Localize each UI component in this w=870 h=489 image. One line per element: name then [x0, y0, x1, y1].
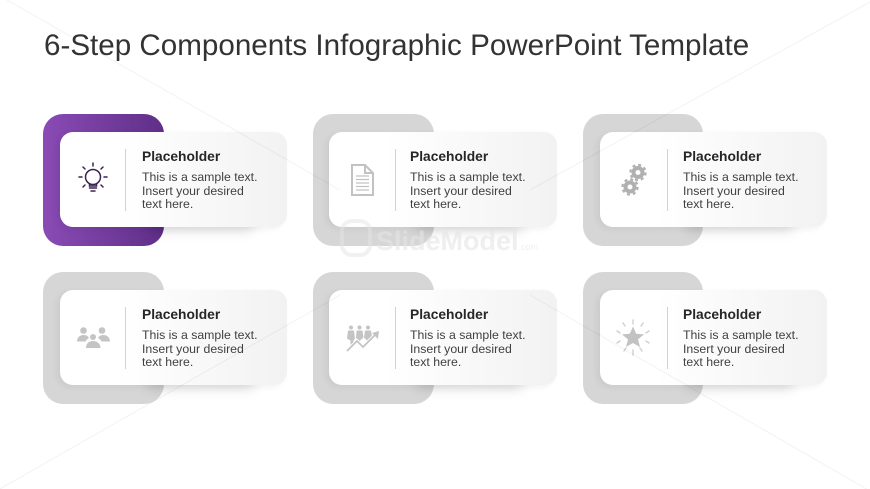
text block: text here. [683, 197, 734, 211]
panel: step 4 team [43, 272, 287, 404]
panel: step 6 star [583, 272, 827, 404]
text block: Insert your desired [142, 184, 244, 198]
text block: Insert your desired [142, 342, 244, 356]
watermark: SlideModel.com [376, 226, 538, 256]
title: 6-Step Components Infographic PowerPoint Template [44, 29, 749, 62]
icon: document [351, 164, 374, 196]
heading: Placeholder [410, 149, 488, 164]
text block [142, 328, 258, 369]
text block: This is a sample text. [683, 328, 798, 342]
text block [683, 328, 798, 369]
text block: text here. [142, 355, 193, 369]
text block: This is a sample text. [410, 170, 526, 184]
watermark [340, 219, 538, 257]
text block: text here. [410, 355, 461, 369]
text block: text here. [683, 355, 734, 369]
text block [410, 328, 526, 369]
icon: people with rising arrow [346, 326, 379, 352]
icon: light bulb [78, 162, 108, 192]
heading: Placeholder [683, 307, 761, 322]
panel: step 1 idea [43, 114, 287, 246]
text block: This is a sample text. [142, 170, 258, 184]
text block [683, 170, 798, 211]
text block: Insert your desired [410, 342, 512, 356]
text block [410, 170, 526, 211]
text block: This is a sample text. [683, 170, 798, 184]
text block [142, 170, 258, 211]
text block: This is a sample text. [410, 328, 526, 342]
text block: text here. [142, 197, 193, 211]
heading: Placeholder [142, 149, 220, 164]
heading: Placeholder [410, 307, 488, 322]
heading: Placeholder [683, 149, 761, 164]
icon: team [77, 327, 110, 348]
panel: step 5 growth [313, 272, 557, 404]
panel: step 2 document [313, 114, 557, 246]
text block: Insert your desired [683, 184, 785, 198]
text block: Insert your desired [410, 184, 512, 198]
panel: step 3 gears [583, 114, 827, 246]
heading: Placeholder [142, 307, 220, 322]
text block: Insert your desired [683, 342, 785, 356]
text block: text here. [410, 197, 461, 211]
icon: gears [621, 164, 647, 196]
text block: This is a sample text. [142, 328, 258, 342]
icon: star burst [616, 319, 650, 356]
